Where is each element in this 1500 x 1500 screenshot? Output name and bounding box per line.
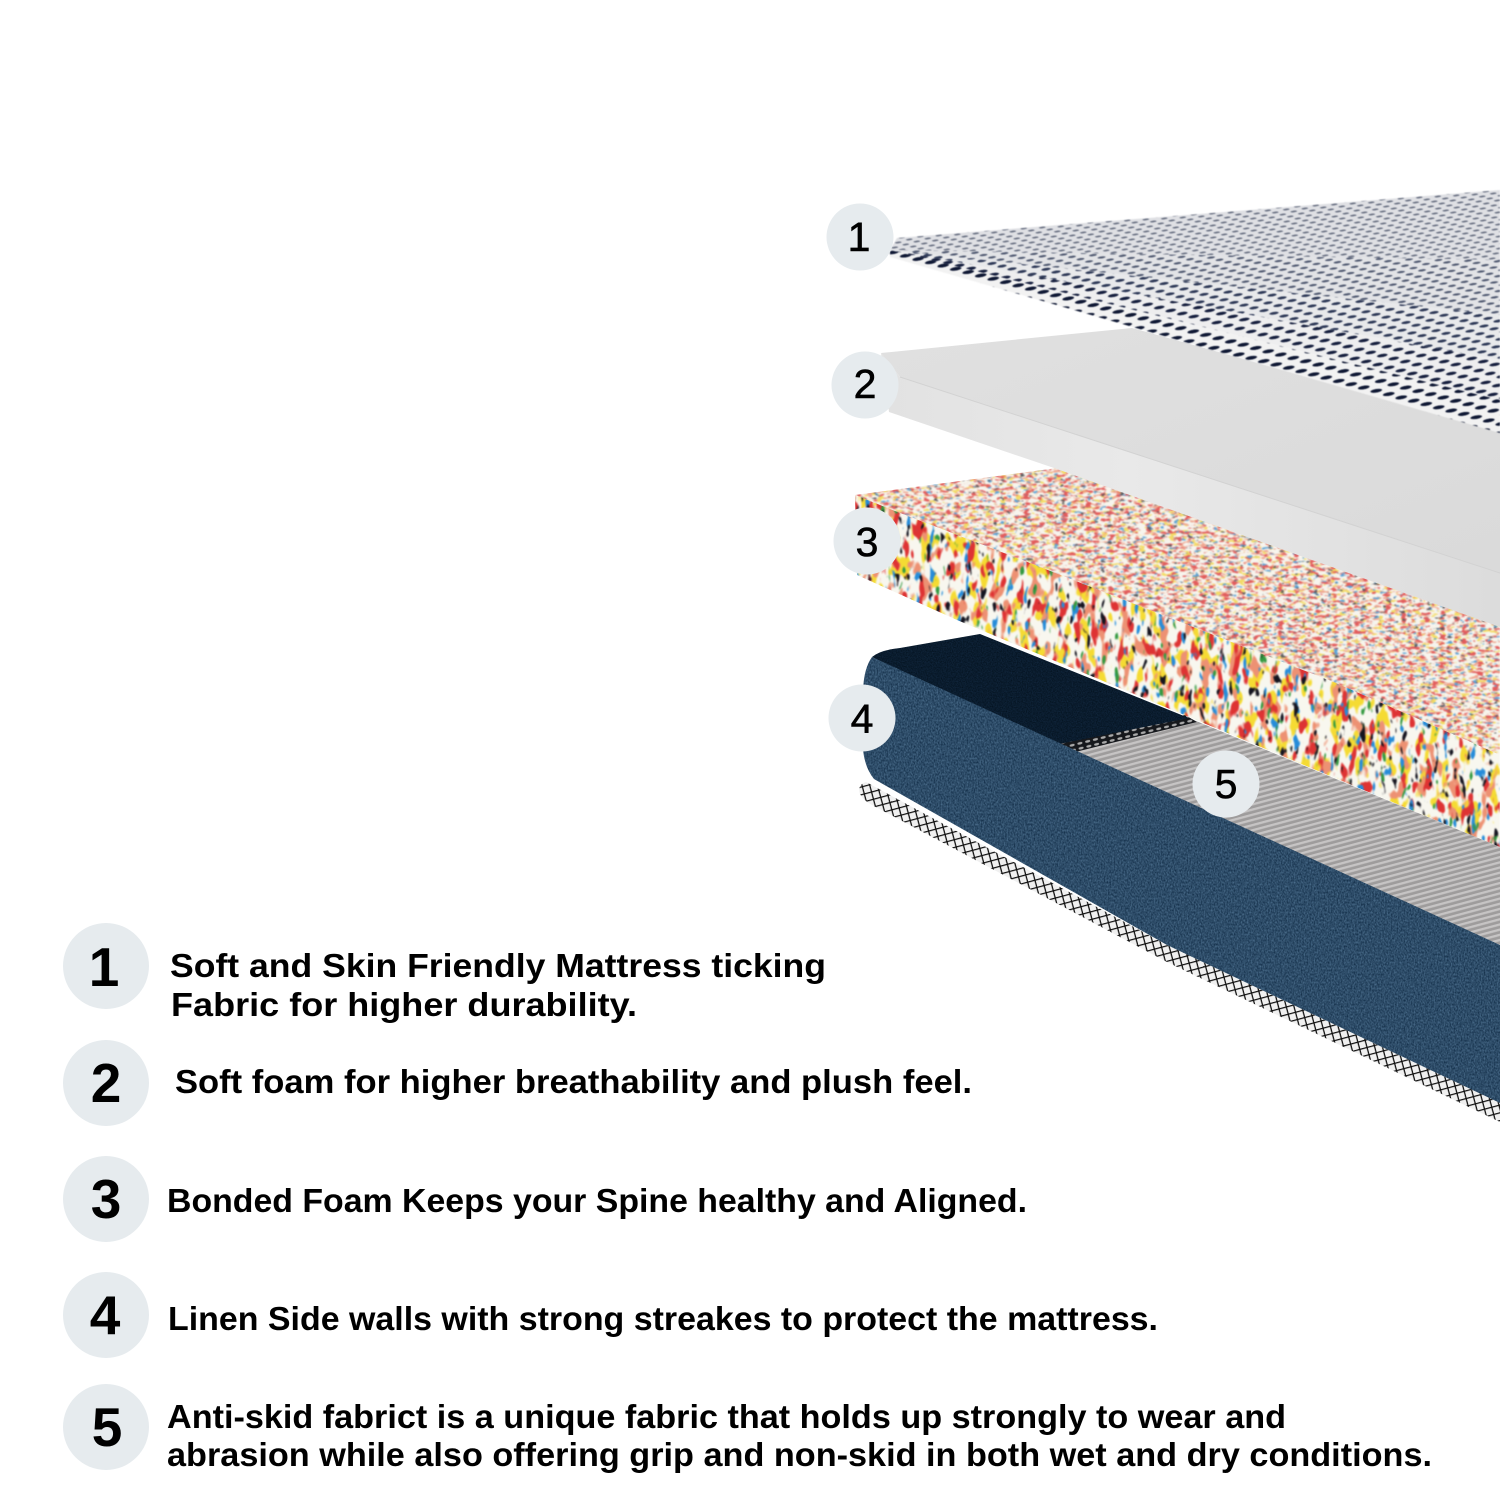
legend item 3 xyxy=(63,1156,1027,1242)
badge 1 xyxy=(826,204,894,270)
badge 2 xyxy=(832,352,898,418)
legend item 1: Fabric for higher durability. xyxy=(171,986,637,1023)
badge 4: 4 xyxy=(851,696,873,742)
badge 3: 3 xyxy=(856,519,878,565)
legend item 5: 5 xyxy=(92,1396,122,1458)
legend item 3: Bonded Foam Keeps your Spine healthy and Aligned. xyxy=(167,1182,1027,1219)
badge 5: 5 xyxy=(1215,761,1237,807)
legend item 1: 1 xyxy=(89,936,119,998)
legend item 3: 3 xyxy=(91,1168,121,1230)
mattress exploded illustration xyxy=(850,190,1500,1122)
badge 1: 1 xyxy=(848,214,870,260)
legend item 1 xyxy=(63,923,826,1023)
layer 4: inner dark wall xyxy=(872,634,1188,744)
legend item 2 xyxy=(63,1040,972,1126)
layer 5: anti-skid net strip xyxy=(859,782,1500,1122)
layer 5: anti-skid fabric base xyxy=(1050,715,1500,945)
layer 3: bonded foam top xyxy=(850,460,1500,760)
layer 1: ticking fabric xyxy=(890,190,1500,433)
legend item 4: Linen Side walls with strong streakes to protect the mattress. xyxy=(168,1300,1158,1337)
badge 4 xyxy=(828,684,896,752)
legend item 5: Anti-skid fabrict is a unique fabric that holds up strongly to wear and xyxy=(167,1398,1286,1435)
legend item 2: 2 xyxy=(91,1052,121,1114)
legend item 4: 4 xyxy=(90,1284,121,1346)
badge 5 xyxy=(1192,750,1260,818)
layer 3: bonded foam side xyxy=(850,490,1500,850)
layer 2: soft foam sheet xyxy=(881,328,1500,627)
legend item 4 xyxy=(63,1272,1158,1358)
legend item 2: Soft foam for higher breathability and plush feel. xyxy=(175,1063,972,1100)
legend item 5: abrasion while also offering grip and non-skid in both wet and dry conditions. xyxy=(167,1436,1432,1473)
badge 2: 2 xyxy=(854,361,876,407)
legend item 1: Soft and Skin Friendly Mattress ticking xyxy=(170,947,826,984)
badge 3 xyxy=(834,508,900,574)
legend item 5 xyxy=(63,1384,1432,1473)
layer 4: linen side wall xyxy=(860,650,1500,1110)
